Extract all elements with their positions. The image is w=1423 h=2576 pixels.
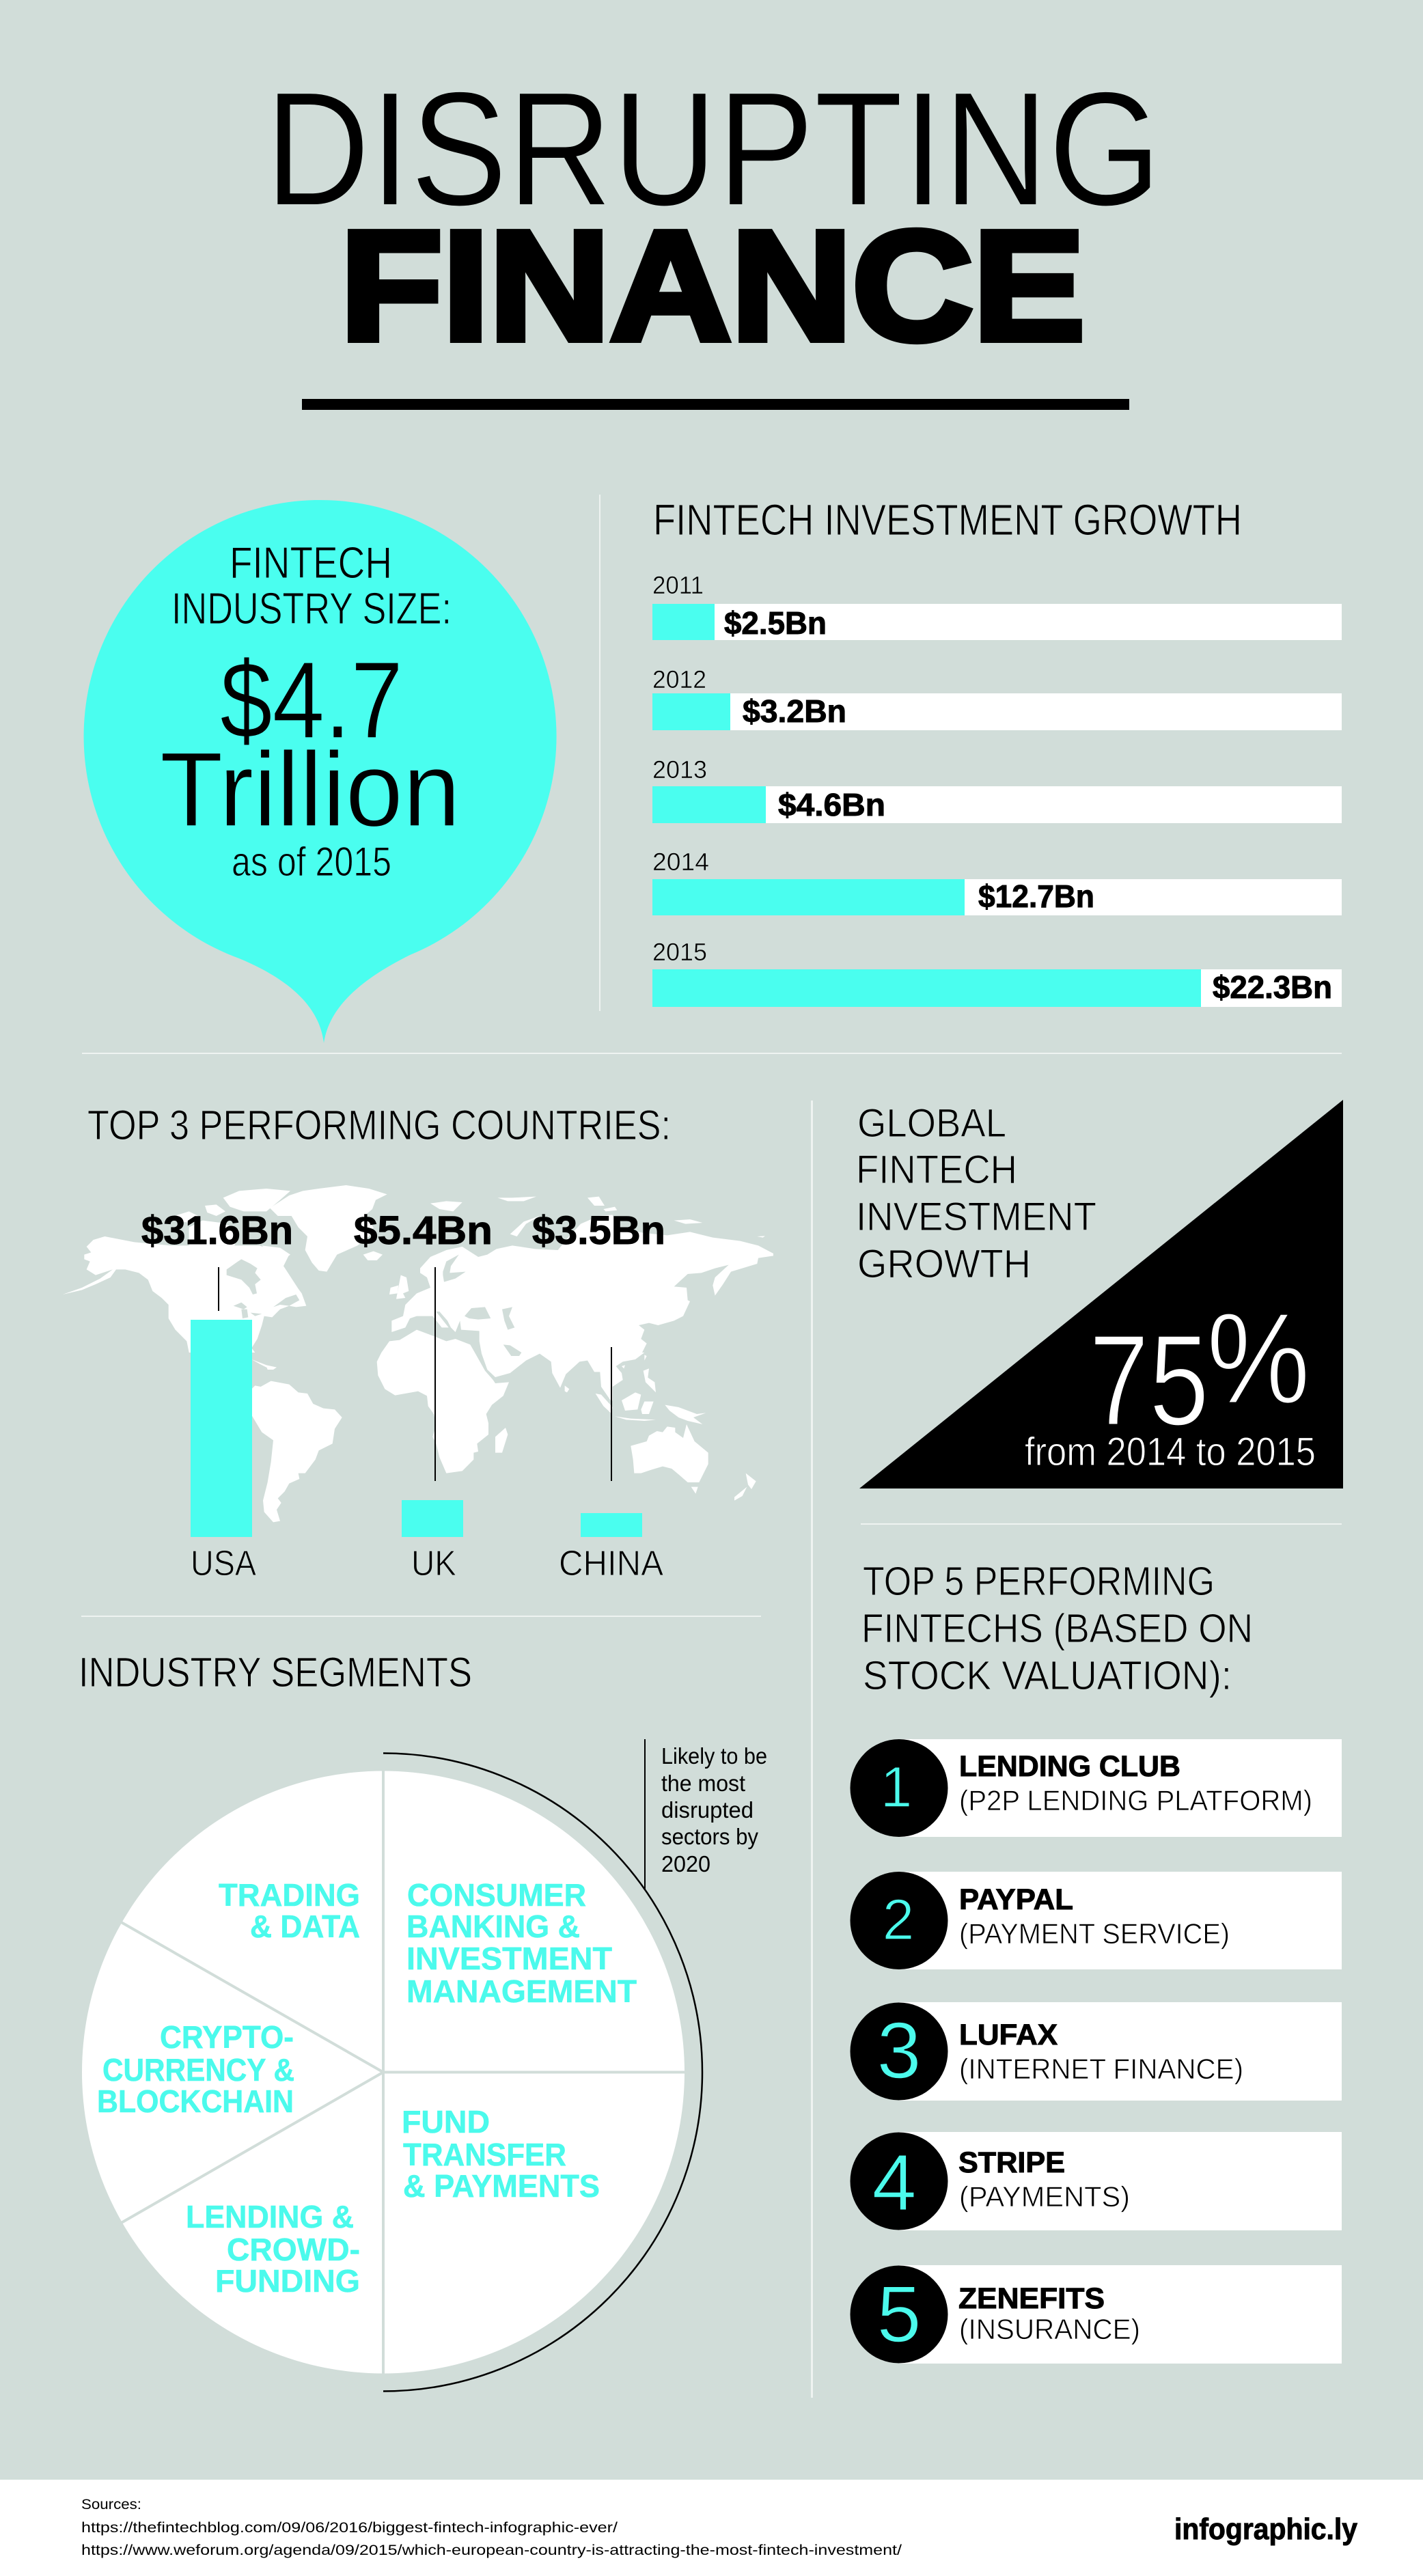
segment: lending: LENDING & [186, 2199, 354, 2234]
bubble text: as of 2015 [232, 839, 391, 885]
bar 2014 [652, 848, 1342, 915]
title: DISRUPTING [265, 59, 1161, 240]
heading: GLOBAL [857, 1101, 1006, 1146]
sources [81, 2497, 902, 2558]
rank 5: 5 [876, 2269, 922, 2359]
heading: INDUSTRY SEGMENTS [79, 1649, 472, 1695]
panel: industry segments [79, 1649, 767, 2391]
bar 2012: 2012 [652, 665, 706, 693]
title [265, 59, 1161, 373]
bar 2014: $12.7Bn [978, 878, 1094, 914]
segment: consumer banking: MANAGEMENT [406, 1973, 637, 2009]
segment: fund transfer: & PAYMENTS [403, 2168, 600, 2204]
bar 2014: 2014 [652, 848, 709, 876]
rank 2 [850, 1872, 1342, 1969]
panel: fintech investment growth [652, 495, 1342, 1007]
rank 3: 3 [876, 2006, 922, 2095]
bar 2012: $3.2Bn [743, 693, 846, 729]
USA bar: USA [191, 1544, 256, 1583]
heading [856, 1101, 1096, 1286]
rank 3: (INTERNET FINANCE) [959, 2053, 1243, 2085]
75 percent: % [1206, 1286, 1310, 1431]
title: FINANCE [340, 199, 1085, 373]
note: the most [661, 1771, 745, 1796]
segment: cryptocurrency: CRYPTO- [160, 2019, 294, 2055]
note: disrupted [661, 1797, 754, 1823]
caption: from 2014 to 2015 [1025, 1430, 1316, 1474]
segment: consumer banking: BANKING & [406, 1909, 580, 1944]
note: sectors by [661, 1824, 758, 1849]
pie chart [82, 1769, 686, 2374]
bubble text: FINTECH [230, 538, 392, 587]
footer [0, 2480, 1423, 2576]
75 percent: 75 [1089, 1308, 1209, 1453]
title underline [302, 399, 1129, 410]
arc bracket [383, 1753, 702, 2391]
UK bar: $5.4Bn [354, 1208, 493, 1253]
panel: top 3 performing countries [63, 1102, 773, 1583]
rank 4 [850, 2132, 1342, 2230]
rank 1: 1 [881, 1755, 912, 1819]
segment: trading and data: TRADING [219, 1877, 360, 1913]
sources: https://thefintechblog.com/09/06/2016/biggest-fintech-infographic-ever/ [81, 2520, 618, 2536]
heading: INVESTMENT [856, 1195, 1096, 1239]
bubble text: Trillion [160, 730, 460, 848]
segment: cryptocurrency: CURRENCY & [102, 2052, 294, 2088]
logo: infographic.ly [1174, 2512, 1357, 2546]
rank 5 [850, 2265, 1342, 2364]
segment: lending: FUNDING [215, 2263, 360, 2299]
bar 2015: $22.3Bn [1213, 969, 1332, 1005]
bar 2013: 2013 [652, 756, 707, 784]
rank 5: (INSURANCE) [959, 2313, 1140, 2345]
segment: fund transfer: FUND [402, 2104, 490, 2139]
bar 2012 [652, 665, 1342, 730]
bar 2011: 2011 [652, 571, 704, 599]
rank 4: STRIPE [958, 2146, 1065, 2179]
China bar: CHINA [559, 1544, 663, 1583]
bubble text: $4.7 [220, 639, 403, 761]
panel: top 5 performing fintechs [850, 1559, 1342, 2364]
rank 2: PAYPAL [959, 1883, 1073, 1916]
USA bar [141, 1208, 293, 1583]
heading: FINTECHS (BASED ON [861, 1606, 1253, 1651]
sources: Sources: [81, 2497, 141, 2512]
note [644, 1739, 767, 1889]
note: 2020 [661, 1851, 710, 1876]
rank 3: LUFAX [959, 2019, 1058, 2051]
sources: https://www.weforum.org/agenda/09/2015/which-european-country-is-attracting-the-most-fintech-investment/ [81, 2543, 902, 2558]
segment: lending [186, 2199, 360, 2299]
rank 1: LENDING CLUB [959, 1750, 1180, 1783]
bar 2013: $4.6Bn [778, 787, 885, 822]
rank 3 [850, 2002, 1342, 2101]
triangle [859, 1100, 1343, 1488]
rank 2: (PAYMENT SERVICE) [959, 1917, 1230, 1950]
segment: fund transfer: TRANSFER [403, 2137, 566, 2172]
UK bar: UK [411, 1544, 456, 1583]
segment: lending: CROWD- [227, 2232, 360, 2267]
speech bubble shape [84, 500, 557, 1043]
UK bar [354, 1208, 493, 1583]
world map [63, 1185, 773, 1522]
bar 2015 [652, 938, 1342, 1007]
China bar [532, 1208, 665, 1583]
heading [861, 1559, 1253, 1698]
bubble text: INDUSTRY SIZE: [171, 583, 452, 633]
heading: STOCK VALUATION): [863, 1653, 1232, 1698]
rank 2: 2 [883, 1887, 914, 1952]
bubble text [160, 538, 460, 885]
heading: FINTECH INVESTMENT GROWTH [653, 495, 1242, 544]
panel: global fintech investment growth [856, 1100, 1343, 1488]
segment: trading and data [219, 1877, 360, 1944]
rank 1 [850, 1739, 1342, 1837]
heading: FINTECH [856, 1148, 1017, 1192]
segment: cryptocurrency [97, 2019, 294, 2119]
note: Likely to be [661, 1743, 767, 1769]
rank 4: 4 [872, 2137, 917, 2227]
segment: fund transfer [402, 2104, 600, 2204]
rank 1: (P2P LENDING PLATFORM) [959, 1784, 1312, 1816]
bar 2013 [652, 756, 1342, 823]
segment: cryptocurrency: BLOCKCHAIN [97, 2083, 294, 2119]
heading: TOP 3 PERFORMING COUNTRIES: [87, 1102, 671, 1148]
bar 2015: 2015 [652, 938, 707, 966]
segment: trading and data: & DATA [250, 1909, 360, 1944]
75 percent [1089, 1286, 1310, 1453]
segment: consumer banking [406, 1877, 637, 2009]
bar 2011 [652, 571, 1342, 641]
USA bar: $31.6Bn [141, 1208, 293, 1253]
rank 5: ZENEFITS [958, 2282, 1105, 2315]
heading: GROWTH [857, 1242, 1031, 1286]
segment: consumer banking: INVESTMENT [406, 1941, 612, 1976]
panel: fintech industry size bubble [84, 500, 557, 1043]
rank 4: (PAYMENTS) [959, 2180, 1130, 2213]
segment: consumer banking: CONSUMER [407, 1877, 586, 1913]
China bar: $3.5Bn [532, 1208, 665, 1253]
bar 2011: $2.5Bn [724, 605, 827, 641]
heading: TOP 5 PERFORMING [863, 1559, 1215, 1604]
